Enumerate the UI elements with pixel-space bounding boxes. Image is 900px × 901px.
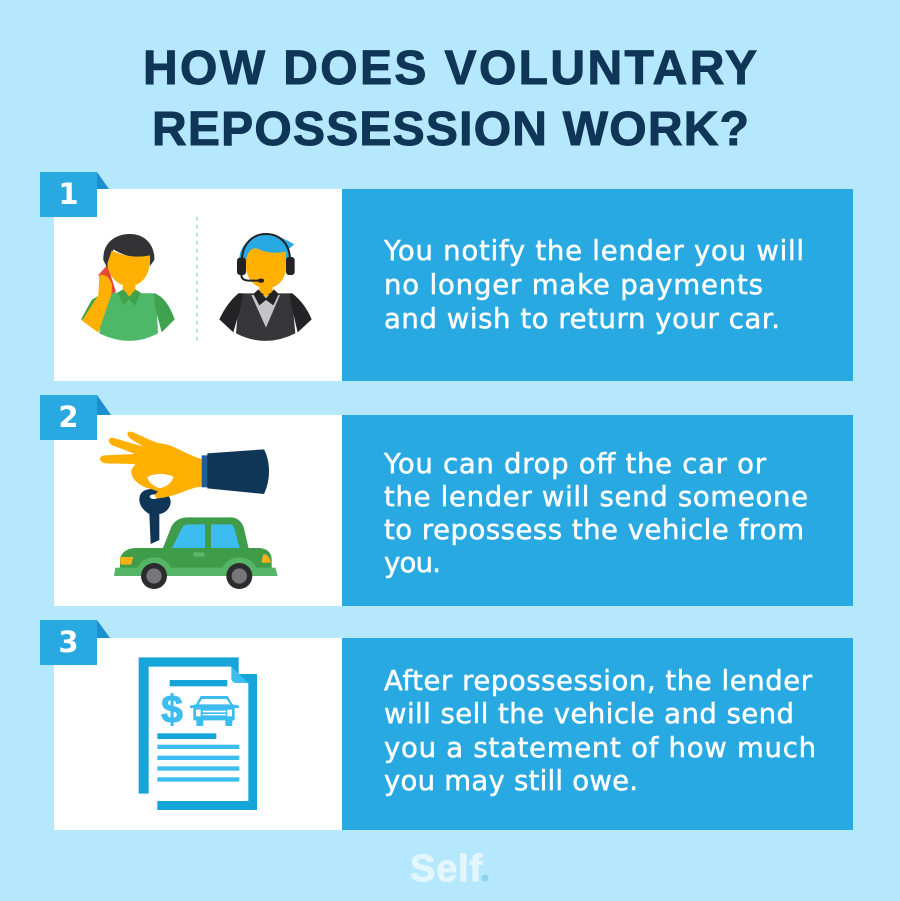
title bbox=[143, 42, 757, 156]
step 2 blue text panel bbox=[342, 415, 853, 606]
icon: statement document bbox=[139, 657, 257, 810]
logo: Self: Self bbox=[410, 848, 482, 890]
step 3 text: will sell the vehicle and send bbox=[384, 698, 794, 730]
icon: key bbox=[139, 489, 171, 544]
icon: hand dropping key above car bbox=[100, 432, 278, 589]
icon: sleeve bbox=[202, 449, 269, 494]
step 3 blue text panel bbox=[342, 638, 853, 830]
panel: step 1 bbox=[40, 172, 853, 381]
icon: car front bbox=[190, 696, 239, 726]
step 2 number badge: 2 bbox=[58, 400, 79, 434]
step 3 text bbox=[384, 665, 816, 797]
step 2 text: you. bbox=[384, 547, 441, 579]
step 1 number badge: 1 bbox=[58, 177, 79, 211]
step 2 text: the lender will send someone bbox=[384, 481, 808, 513]
step 1 number badge bbox=[40, 172, 109, 217]
panel: step 2 bbox=[40, 395, 853, 606]
title: HOW DOES VOLUNTARY bbox=[143, 42, 757, 95]
title: REPOSSESSION WORK? bbox=[152, 103, 749, 156]
step 2 number badge bbox=[40, 395, 111, 440]
icon: caller and call-centre agent bbox=[81, 217, 312, 343]
step 2 white card bbox=[54, 415, 342, 606]
step 3 text: After repossession, the lender bbox=[384, 665, 813, 697]
step 1 text: and wish to return your car. bbox=[384, 303, 780, 335]
panel: step 3 bbox=[40, 620, 853, 830]
icon: person on phone bbox=[81, 234, 175, 341]
step 1 text: no longer make payments bbox=[384, 269, 763, 301]
step 1 text bbox=[383, 235, 804, 335]
icon: car bbox=[114, 517, 278, 589]
step 3 text: you a statement of how much bbox=[384, 732, 816, 764]
step 1 blue text panel bbox=[342, 189, 853, 381]
divider bbox=[195, 217, 198, 343]
step 1 white card bbox=[54, 189, 342, 381]
icon: hand bbox=[100, 432, 202, 498]
step 1 text: You notify the lender you will bbox=[383, 235, 804, 267]
icon: dollar sign: $ bbox=[161, 688, 183, 731]
step 3 text: you may still owe. bbox=[384, 765, 638, 797]
step 3 number badge bbox=[40, 620, 110, 665]
step 3 white card bbox=[54, 638, 342, 830]
step 2 text bbox=[383, 448, 808, 579]
step 2 text: to repossess the vehicle from bbox=[384, 514, 804, 546]
step 3 number badge: 3 bbox=[58, 625, 79, 659]
icon: headset agent bbox=[219, 234, 312, 341]
step 2 text: You can drop off the car or bbox=[383, 448, 767, 480]
